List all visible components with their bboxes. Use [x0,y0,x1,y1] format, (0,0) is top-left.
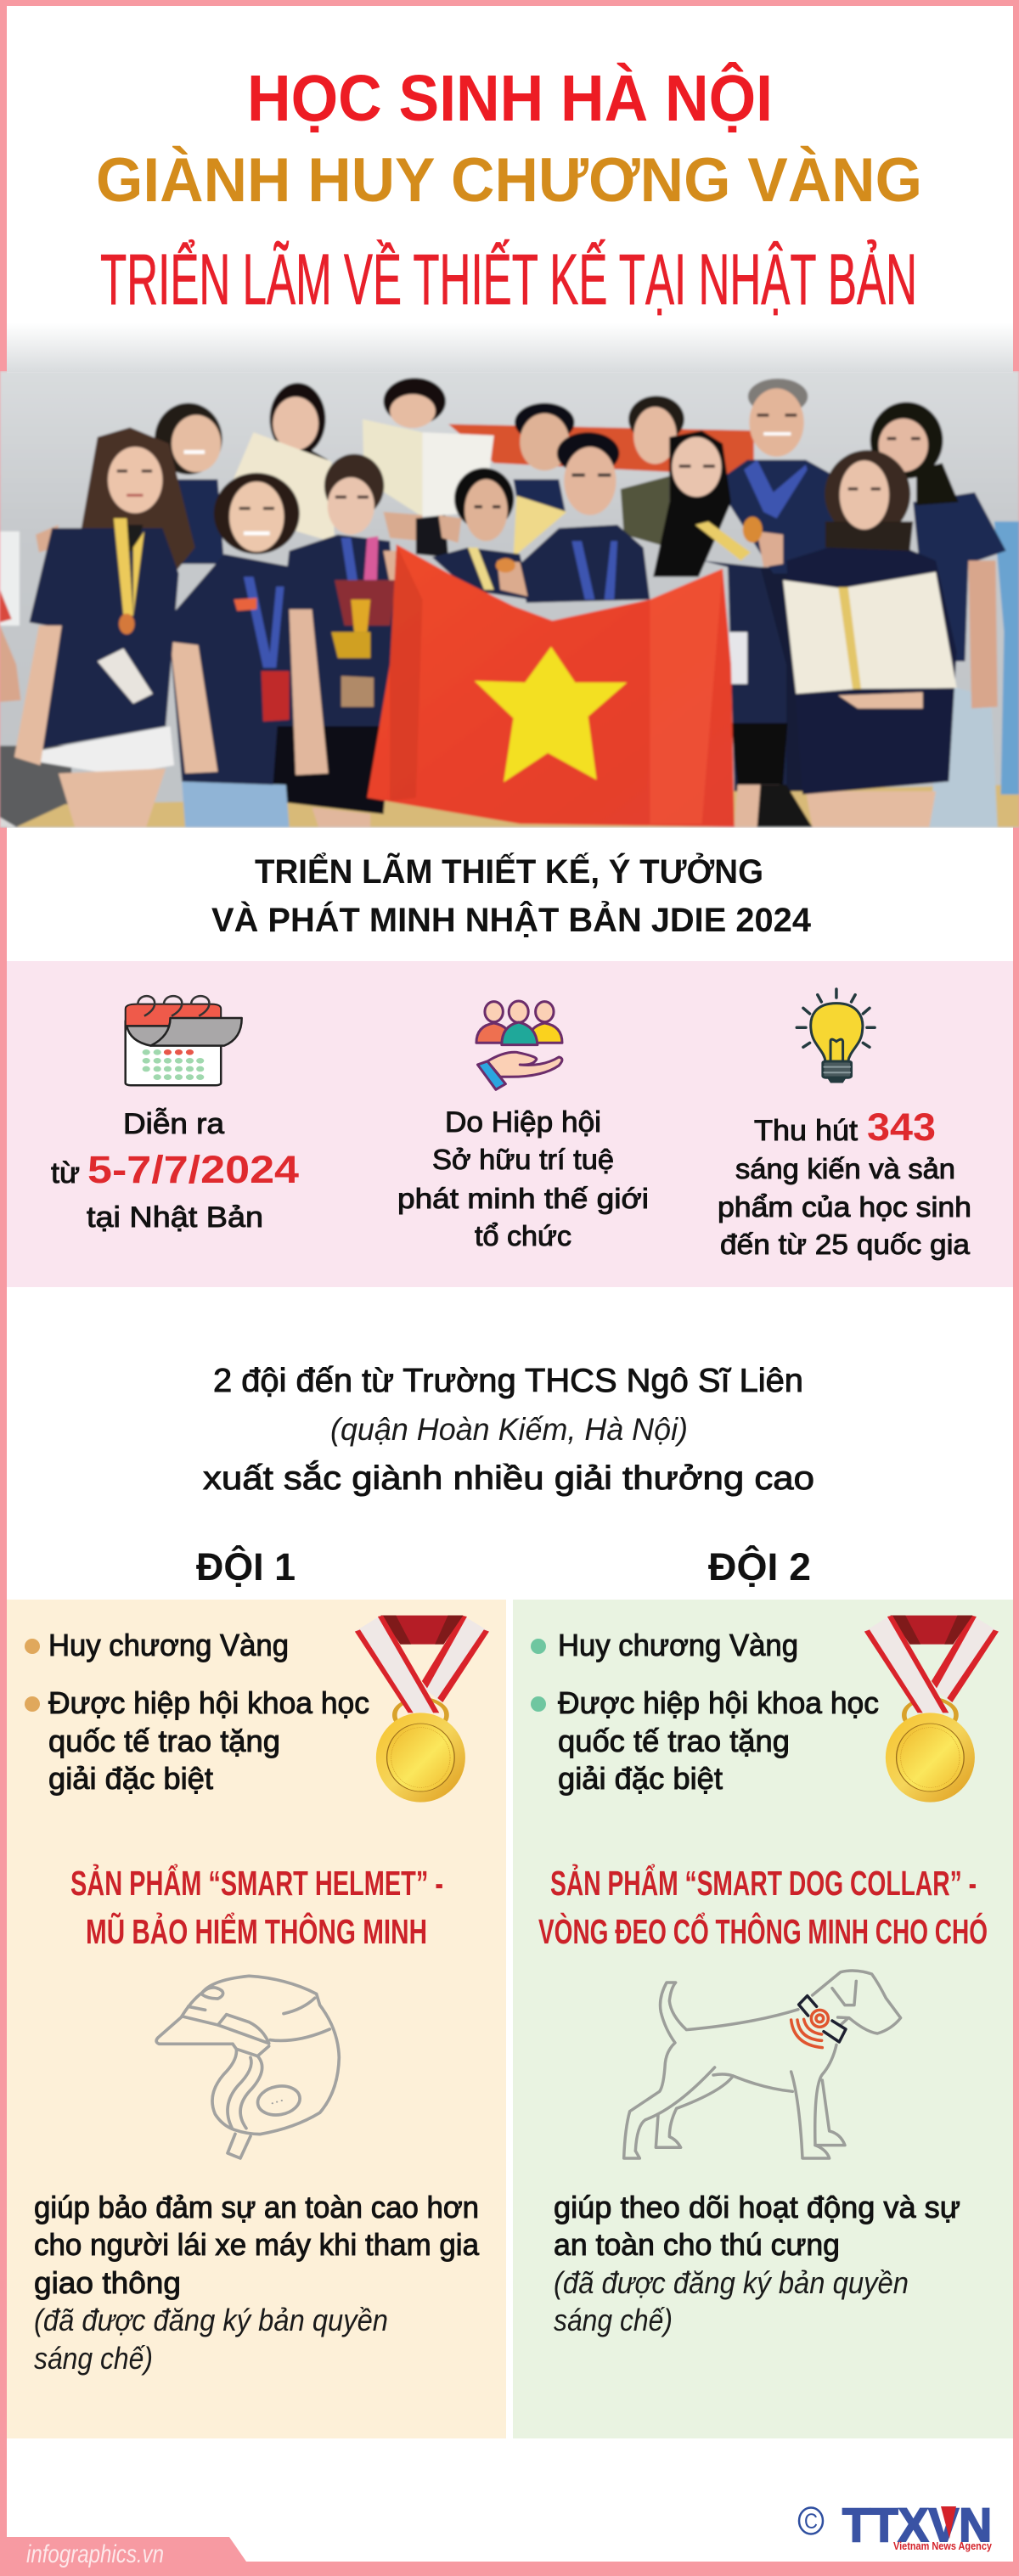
title [96,61,922,319]
text: event dates: từ [51,1157,80,1190]
logo: TTXVN: TTXVN [842,2498,992,2551]
text: school intro: 2 đội đến từ Trường THCS Ngô Sĩ Liên [213,1363,803,1399]
product title [70,1863,443,1951]
icon: gold medal [355,1616,489,1803]
logo: TTXVN: Vietnam News Agency [893,2539,993,2552]
product description: sáng chế) [34,2341,153,2376]
footer tab: infographics.vn: infographics.vn [26,2540,164,2568]
text: number of entries: sáng kiến và sản [735,1153,955,1184]
text: event dates: 5-7/7/2024 [87,1148,299,1191]
title: HỌC SINH HÀ NỘI [247,61,773,135]
title: GIÀNH HUY CHƯƠNG VÀNG [96,146,922,215]
text: school intro: (quận Hoàn Kiếm, Hà Nội) [330,1412,688,1447]
heading: exhibition name [211,851,812,939]
text: organiser: Sở hữu trí tuệ [432,1144,614,1175]
awards list: Được hiệp hội khoa học [48,1685,369,1720]
product description: sáng chế) [554,2303,673,2337]
panel: team 1 [7,1600,506,2438]
product title: MŨ BẢO HIỂM THÔNG MINH [86,1911,427,1951]
product description: (đã được đăng ký bản quyền [554,2265,909,2300]
text: number of entries: Thu hút [754,1115,859,1147]
awards list: quốc tế trao tặng [558,1724,790,1758]
awards list: Được hiệp hội khoa học [558,1685,879,1720]
panel: exhibition facts [7,961,1013,1287]
text: school intro: xuất sắc giành nhiều giải thưởng cao [203,1460,814,1497]
product title: SẢN PHẨM “SMART HELMET” - [70,1863,443,1903]
text: organiser: Do Hiệp hội [445,1106,601,1139]
icon: people over open hand [476,1001,562,1089]
panel: team 2 [513,1600,1013,2438]
heading: exhibition name: TRIỂN LÃM THIẾT KẾ, Ý TƯỞNG [255,851,763,891]
awards list [25,1628,369,1796]
text: number of entries: 343 [867,1105,936,1149]
product description [34,2190,480,2376]
awards list: Huy chương Vàng [558,1628,798,1662]
awards list: giải đặc biệt [48,1761,213,1796]
product description: giúp theo dõi hoạt động và sự [554,2190,960,2224]
text: event dates: tại Nhật Bản [87,1201,263,1234]
text: number of entries: phẩm của học sinh [718,1191,971,1223]
icon: dog with smart collar [624,1971,901,2158]
product description: giúp bảo đảm sự an toàn cao hơn [34,2190,479,2224]
logo: TTXVN: C [804,2510,818,2534]
text: event dates: Diễn ra [123,1108,224,1140]
icon: light bulb [797,989,875,1082]
icon: gold medal [864,1616,999,1803]
text: event dates [51,1108,299,1234]
awards list: giải đặc biệt [558,1761,723,1796]
awards list: quốc tế trao tặng [48,1724,280,1758]
group photo with Vietnamese flag [0,323,1019,828]
awards list: Huy chương Vàng [48,1628,289,1662]
heading: exhibition name: VÀ PHÁT MINH NHẬT BẢN JDIE 2024 [211,900,812,939]
heading: team 1: ĐỘI 1 [196,1545,296,1589]
product description [554,2190,960,2337]
product description: giao thông [34,2265,181,2300]
text: organiser [397,1106,649,1251]
product description: an toàn cho thú cưng [554,2227,840,2262]
text: school intro [203,1363,814,1497]
product title [538,1863,988,1951]
text: organiser: phát minh thế giới [397,1183,649,1214]
product description: (đã được đăng ký bản quyền [34,2303,388,2337]
footer tab: infographics.vn [0,2537,246,2576]
heading: team 2: ĐỘI 2 [708,1545,811,1589]
awards list [531,1628,879,1796]
icon: calendar [126,996,242,1085]
text: number of entries: đến từ 25 quốc gia [720,1229,971,1260]
text: number of entries [718,1105,971,1260]
text: organiser: tổ chức [475,1220,571,1251]
icon: helmet [156,1976,339,2158]
product description: cho người lái xe máy khi tham gia [34,2227,480,2262]
